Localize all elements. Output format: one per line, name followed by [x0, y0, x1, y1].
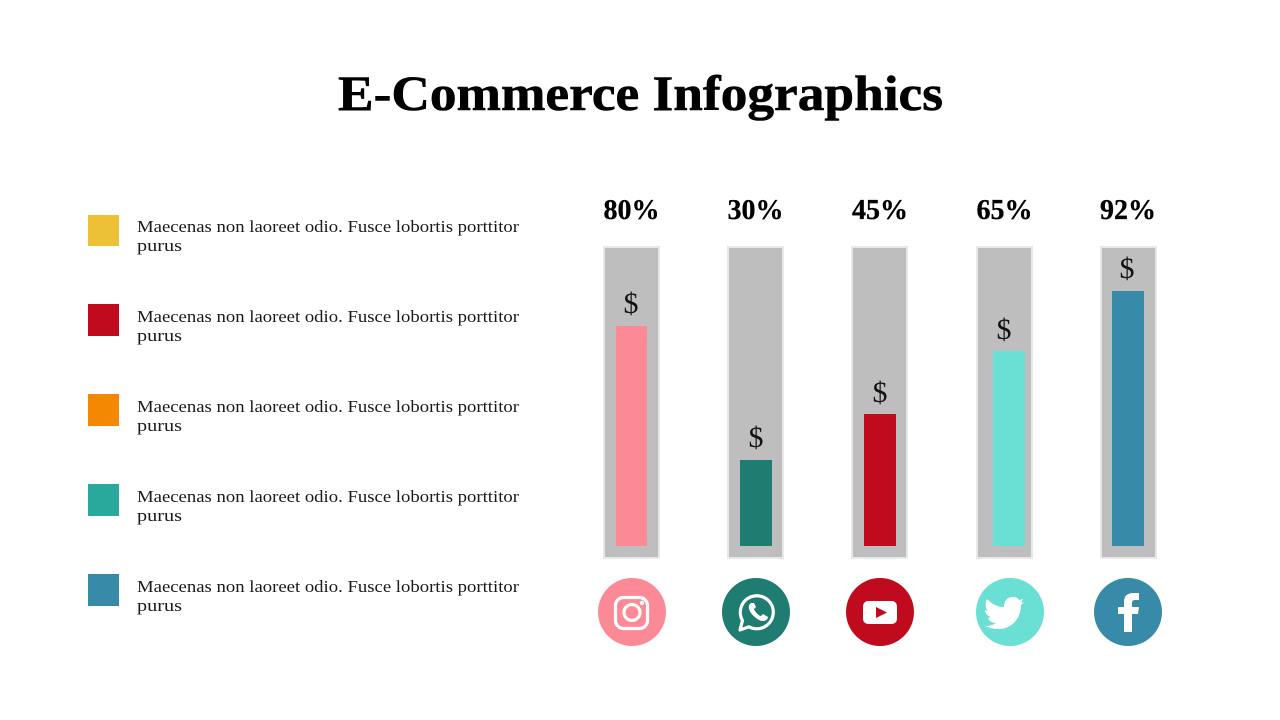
bar column: 65% [976, 195, 1032, 558]
legend item: teal: Maecenas non laoreet odio. Fusce lobortis porttitor [137, 487, 519, 506]
legend [88, 215, 519, 615]
title: E-Commerce Infographics [338, 65, 943, 121]
icon: youtube [846, 578, 914, 646]
legend item: yellow: Maecenas non laoreet odio. Fusce lobortis porttitor [137, 217, 519, 236]
legend item: orange [88, 394, 519, 435]
icon: whatsapp [722, 578, 790, 646]
legend item: red: Maecenas non laoreet odio. Fusce lobortis porttitor [137, 307, 519, 326]
bar column: 80%: $ [624, 287, 638, 320]
legend item: teal: purus [137, 506, 182, 525]
bar column: 92% [1100, 195, 1156, 558]
bar column: 80% [604, 195, 660, 558]
legend item: blue [88, 574, 519, 615]
icon: instagram [598, 578, 666, 646]
bar column: 92%: 92% [1100, 195, 1156, 226]
icon: twitter [976, 578, 1044, 646]
bar column: 30% [728, 195, 784, 558]
bar column: 65%: 65% [976, 195, 1032, 226]
legend item: orange: Maecenas non laoreet odio. Fusce lobortis porttitor [137, 397, 519, 416]
bar column: 80%: 80% [604, 195, 660, 226]
legend item: teal [88, 484, 519, 525]
legend item: orange: purus [137, 416, 182, 435]
legend item: blue: Maecenas non laoreet odio. Fusce lobortis porttitor [137, 577, 519, 596]
legend item: red: purus [137, 326, 182, 345]
legend item: blue: purus [137, 596, 182, 615]
bar column: 30%: 30% [728, 195, 784, 226]
bar column: 30%: $ [748, 421, 764, 454]
bar column: 92%: $ [1120, 252, 1134, 285]
legend item: yellow [88, 215, 519, 255]
icon: facebook [1094, 578, 1162, 646]
legend item: red [88, 304, 519, 345]
bar column: 45%: $ [872, 376, 888, 409]
bar column: 45%: 45% [852, 195, 908, 226]
legend item: yellow: purus [137, 236, 182, 255]
bar column: 45% [852, 195, 908, 558]
bar column: 65%: $ [996, 313, 1012, 346]
